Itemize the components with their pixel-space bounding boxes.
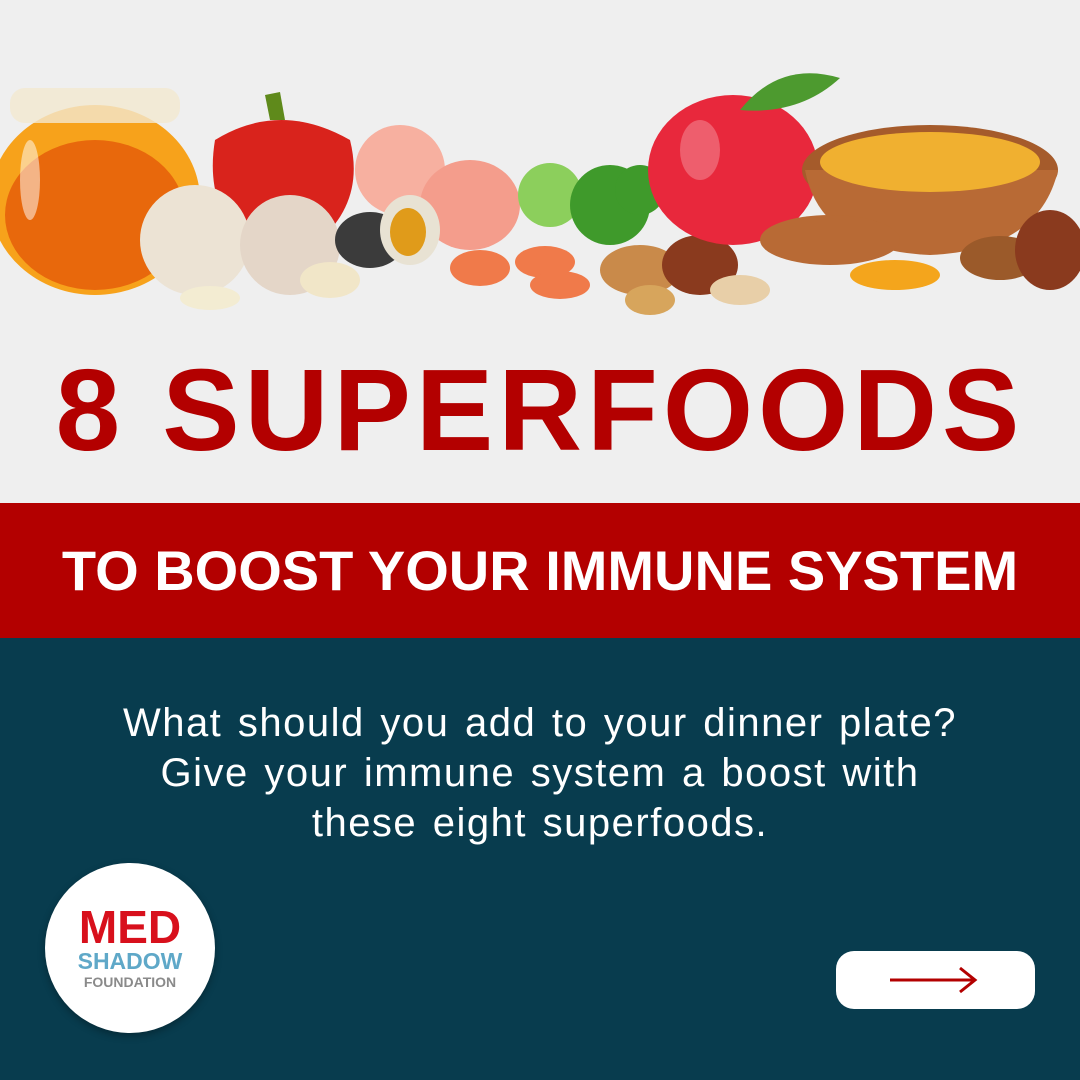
icon: broccoli <box>518 163 665 245</box>
bottom panel <box>0 638 1080 1080</box>
icon: honey jar <box>0 88 200 295</box>
intro text: What should you add to your dinner plate? <box>123 701 957 745</box>
icon: salmon <box>355 125 520 250</box>
title: 8 SUPERFOODS <box>56 345 1024 475</box>
logo: SHADOW <box>78 948 182 974</box>
logo: FOUNDATION <box>84 974 176 990</box>
icon: apple <box>648 73 840 245</box>
subtitle band: TO BOOST YOUR IMMUNE SYSTEM <box>62 539 1018 602</box>
icon: mussels <box>335 195 440 268</box>
intro text: these eight superfoods. <box>312 801 768 845</box>
icon: red pepper <box>213 92 354 250</box>
icon: nuts <box>600 235 770 315</box>
logo <box>45 863 215 1033</box>
subtitle band <box>0 503 1080 638</box>
icon: shrimp <box>450 246 590 299</box>
icon: garlic <box>140 185 360 310</box>
intro text <box>123 701 957 845</box>
food illustration <box>0 73 1080 315</box>
icon: turmeric bowl <box>760 125 1080 290</box>
logo: MED <box>79 901 181 953</box>
button with arrow <box>836 951 1035 1009</box>
intro text: Give your immune system a boost with <box>161 751 919 795</box>
